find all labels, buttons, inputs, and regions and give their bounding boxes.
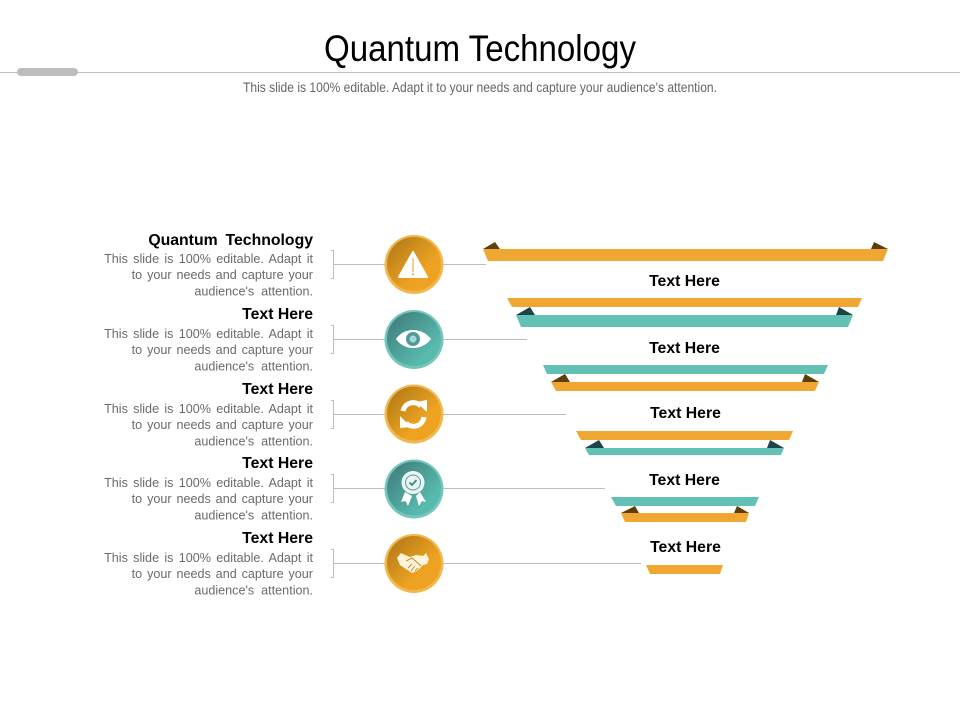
funnel bar 8: [611, 497, 759, 506]
funnel bar 2: [507, 298, 862, 307]
text block 1: This slide is 100% editable. Adapt it: [104, 252, 313, 266]
text block 2: audience's attention.: [194, 360, 313, 374]
icon: handshake: [384, 534, 444, 593]
text block 4: audience's attention.: [194, 508, 313, 522]
text block 5: to your needs and capture your: [132, 567, 313, 581]
icon: warning: [384, 235, 444, 294]
funnel labels: [649, 273, 721, 556]
funnel labels: Text Here: [650, 405, 721, 422]
text block 4: [104, 455, 313, 522]
text block 3: [104, 381, 313, 448]
title: Quantum Technology: [324, 28, 636, 69]
funnel bar 7: [585, 440, 784, 455]
text block 1: to your needs and capture your: [132, 268, 313, 282]
subtitle: This slide is 100% editable. Adapt it to your needs and capture your audience's attention.: [243, 79, 717, 95]
funnel bar 5: [551, 374, 819, 391]
funnel labels: Text Here: [649, 340, 720, 357]
text block 3: to your needs and capture your: [132, 418, 313, 432]
text block 1: Quantum Technology: [148, 232, 313, 249]
text block 5: [104, 530, 313, 598]
funnel bar 3: [516, 307, 853, 327]
funnel labels: Text Here: [649, 273, 720, 290]
header rule with pill: [0, 68, 960, 76]
text block 2: [104, 306, 313, 374]
text block 3: This slide is 100% editable. Adapt it: [104, 402, 313, 416]
text block 2: Text Here: [242, 306, 313, 323]
text block 4: Text Here: [242, 455, 313, 472]
text block 4: This slide is 100% editable. Adapt it: [104, 476, 313, 490]
text block 4: to your needs and capture your: [132, 492, 313, 506]
text block 3: audience's attention.: [194, 434, 313, 448]
text block 5: Text Here: [242, 530, 313, 547]
text block 1: [104, 232, 313, 298]
funnel bar 9: [621, 506, 749, 522]
icon: award ribbon: [384, 460, 444, 518]
text block 5: audience's attention.: [194, 584, 313, 598]
text block 2: This slide is 100% editable. Adapt it: [104, 327, 313, 341]
funnel bar 1: [483, 242, 888, 261]
funnel labels: Text Here: [649, 472, 720, 489]
text block 1: audience's attention.: [194, 284, 313, 298]
text block 5: This slide is 100% editable. Adapt it: [104, 551, 313, 565]
icon: refresh: [384, 384, 444, 444]
funnel labels: Text Here: [650, 539, 721, 556]
icon: eye: [384, 310, 444, 369]
funnel bar 6: [576, 431, 793, 440]
text block 3: Text Here: [242, 381, 313, 398]
connector lines and brackets: [331, 250, 641, 578]
text block 2: to your needs and capture your: [132, 343, 313, 357]
funnel bar 4: [543, 365, 828, 374]
funnel bar 10: [646, 565, 723, 574]
